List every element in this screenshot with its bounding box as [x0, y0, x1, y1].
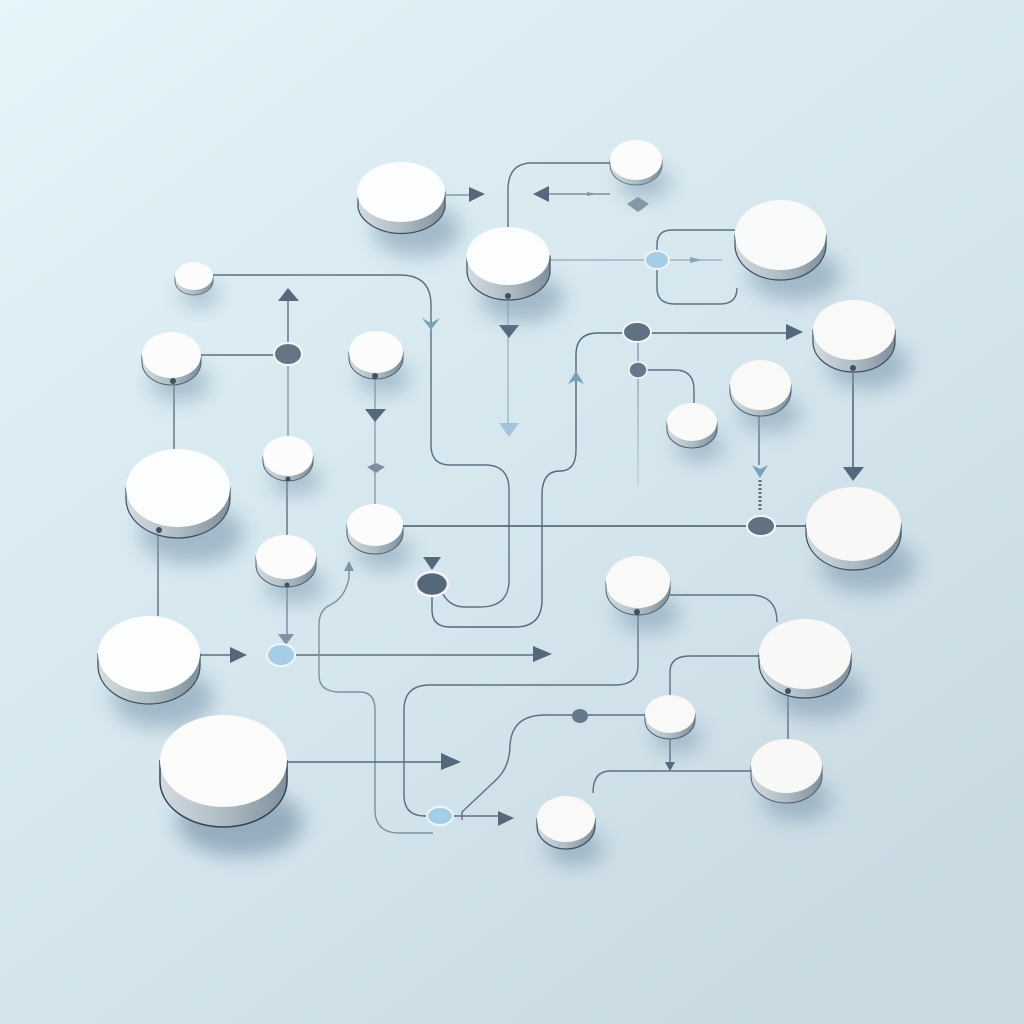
disc 1: [357, 162, 461, 256]
disc 18: [759, 619, 864, 719]
disc 19: [645, 695, 703, 753]
connectors: [158, 163, 853, 833]
disc 10: [667, 403, 725, 462]
disc 5: [175, 262, 219, 307]
disc 9: [730, 360, 801, 433]
disc 21: [160, 715, 303, 856]
arrowheads: [230, 186, 864, 826]
disc 6: [813, 300, 909, 389]
disc 12: [126, 449, 244, 564]
disc 14: [806, 487, 916, 593]
disc 4: [735, 200, 841, 301]
disc 16: [606, 556, 680, 633]
disc 20: [751, 739, 832, 821]
disc 11: [263, 436, 321, 495]
disc 3: [466, 227, 564, 322]
disc 17: [98, 616, 214, 728]
disc 2: [610, 140, 671, 199]
disc 7: [142, 332, 210, 401]
anchor dots: [156, 293, 856, 694]
disc 8: [349, 331, 411, 394]
disc 22: [537, 796, 604, 866]
junction nodes: [267, 251, 775, 825]
disc 15: [256, 535, 325, 603]
disc 13: [347, 504, 412, 570]
